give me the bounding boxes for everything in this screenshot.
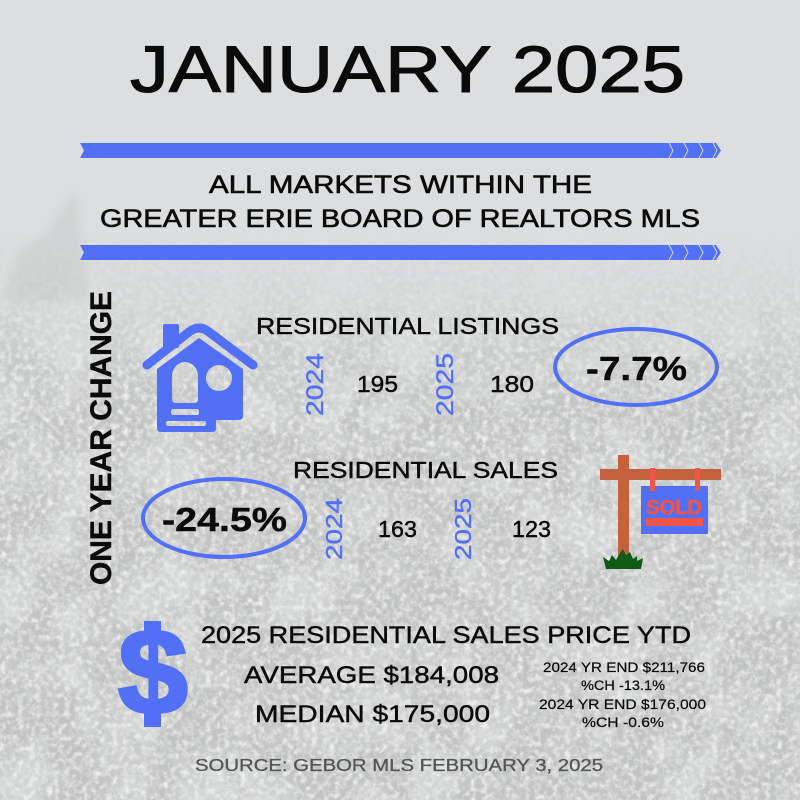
top chevron bar — [80, 143, 721, 158]
median comparison note: 2024 YR END $176,000 — [539, 697, 706, 712]
price heading: 2025 RESIDENTIAL SALES PRICE YTD — [201, 622, 691, 649]
sales 2024 value: 163 — [378, 516, 417, 542]
median price: MEDIAN $175,000 — [255, 701, 490, 728]
bottom chevron bar — [80, 245, 721, 260]
subtitle: GREATER ERIE BOARD OF REALTORS MLS — [100, 205, 700, 233]
callout: sales change — [143, 479, 305, 557]
callout: listings change: -7.7% — [586, 350, 687, 387]
side heading: one year change: ONE YEAR CHANGE — [85, 291, 118, 585]
average comparison note: 2024 YR END $211,766 — [543, 660, 705, 675]
section: residential sales — [293, 457, 558, 560]
median comparison note — [539, 697, 706, 730]
section: residential listings — [256, 313, 559, 416]
sales 2025 value: 123 — [512, 516, 551, 542]
section: sales price — [201, 622, 691, 728]
source note: SOURCE: GEBOR MLS FEBRUARY 3, 2025 — [195, 755, 603, 775]
callout: listings change — [555, 329, 717, 405]
title: JANUARY 2025 — [130, 32, 685, 106]
listings 2025 label: 2025 — [432, 353, 459, 416]
sales 2024 label: 2024 — [321, 498, 347, 560]
icon: sold sign: SOLD — [646, 497, 702, 519]
average comparison note: %CH -13.1% — [581, 678, 665, 693]
icon: dollar sign: $ — [118, 604, 188, 740]
listings 2024 value: 195 — [357, 371, 398, 397]
average comparison note — [543, 660, 705, 693]
listings 2024 label: 2024 — [302, 353, 329, 416]
listings 2025 value: 180 — [490, 371, 534, 397]
sales 2025 label: 2025 — [450, 498, 476, 560]
callout: sales change: -24.5% — [162, 501, 287, 538]
average price: AVERAGE $184,008 — [244, 662, 499, 689]
icon: house — [147, 324, 253, 432]
median comparison note: %CH -0.6% — [582, 715, 664, 730]
icon: sold sign — [600, 455, 721, 569]
subtitle: ALL MARKETS WITHIN THE — [209, 171, 592, 199]
sales heading: RESIDENTIAL SALES — [293, 457, 558, 483]
subtitle — [100, 171, 700, 233]
listings heading: RESIDENTIAL LISTINGS — [256, 313, 559, 339]
